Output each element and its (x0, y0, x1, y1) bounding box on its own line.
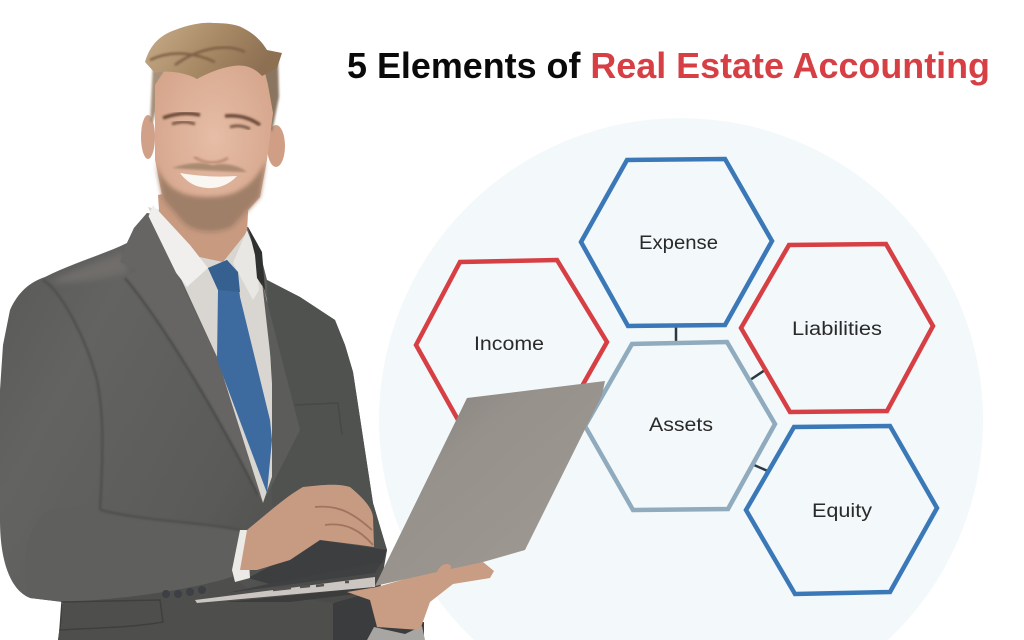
mustache (172, 163, 247, 172)
sleeve seam (43, 280, 102, 510)
torso right shading (267, 280, 387, 550)
shoulder highlight (50, 252, 128, 283)
right lapel (262, 282, 300, 503)
eyebrows (163, 114, 260, 125)
far sleeve (333, 585, 424, 640)
elbow crease (100, 510, 240, 530)
laptop keyboard (227, 562, 382, 593)
lower sleeve (25, 507, 240, 602)
thumb (436, 564, 451, 592)
shirt cuff (232, 530, 250, 582)
hexagon: assets (585, 342, 775, 510)
side fade hair (150, 62, 175, 122)
eyes (172, 122, 250, 129)
tie (208, 260, 272, 493)
suit jacket (0, 213, 387, 640)
smile (180, 173, 237, 188)
dark interior under hand (248, 540, 387, 585)
hexagon: assets: Assets (649, 415, 713, 436)
hexagon: income: Income (474, 334, 544, 355)
lapel edge (125, 278, 258, 495)
laptop base (195, 577, 375, 603)
hexagon: income (416, 260, 607, 427)
pocket flap (60, 600, 163, 630)
far cuff (367, 626, 425, 640)
hexagon: expense (581, 159, 772, 326)
hexagon: equity (746, 426, 937, 594)
shirt (148, 207, 273, 503)
ears (141, 115, 155, 159)
hexagon: equity: Equity (812, 501, 873, 522)
beard (155, 160, 266, 232)
shirt collar right (233, 230, 259, 300)
dark collar inside (248, 227, 265, 290)
laptop screen (375, 381, 605, 586)
nose shadow (194, 157, 228, 163)
finger lines (315, 507, 373, 545)
businessman with laptop (0, 23, 605, 640)
hexagon: liabilities (741, 244, 933, 412)
tie knot shadow (208, 260, 240, 292)
shirt collar left (143, 205, 208, 287)
left lapel (120, 213, 263, 503)
background circle (379, 118, 983, 640)
laptop ports (273, 582, 349, 590)
neck (158, 175, 250, 262)
hexagon: expense: Expense (639, 233, 718, 254)
typing hand (240, 485, 374, 570)
holding hand (347, 562, 494, 630)
laptop base underside (225, 587, 375, 602)
breast pocket (295, 403, 342, 435)
jacket lower front (58, 577, 333, 640)
sleeve buttons (162, 586, 206, 598)
title: 5 Elements of Real Estate Accounting (347, 45, 990, 86)
hair strands (150, 48, 245, 65)
connector lines (676, 326, 770, 472)
hair (145, 23, 282, 79)
face (155, 60, 273, 232)
hexagon: liabilities: Liabilities (792, 319, 882, 340)
